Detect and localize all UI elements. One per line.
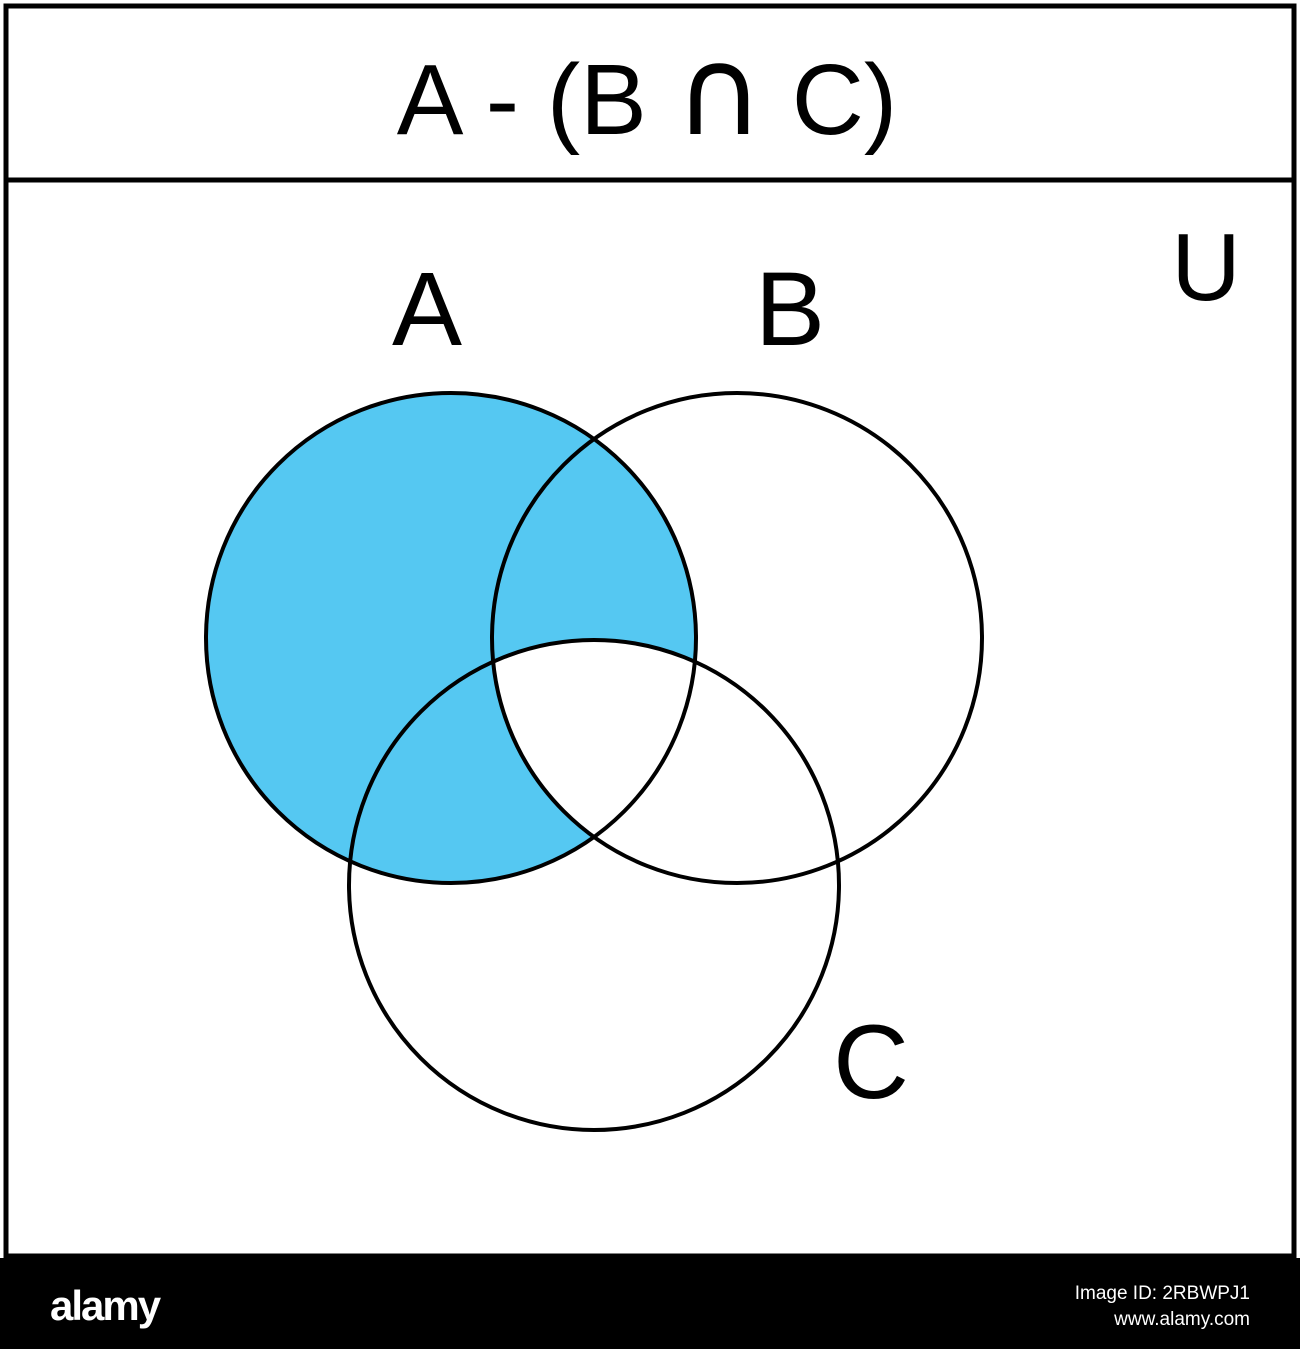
footer bar: Image ID: 2RBWPJ1: [1075, 1283, 1250, 1304]
label B: B: [755, 251, 825, 368]
universe label U: U: [1171, 214, 1241, 321]
shaded region A minus (B ∩ C): [208, 395, 694, 881]
label C: C: [833, 1004, 909, 1121]
title: A - (B ∩ C): [397, 21, 897, 163]
circle B: [492, 393, 982, 883]
footer bar: [0, 1258, 1300, 1349]
footer bar: www.alamy.com: [1113, 1309, 1250, 1330]
label A: A: [392, 251, 462, 368]
circle C: [349, 640, 839, 1130]
circle A: [206, 393, 696, 883]
footer bar: alamy: [50, 1282, 162, 1329]
